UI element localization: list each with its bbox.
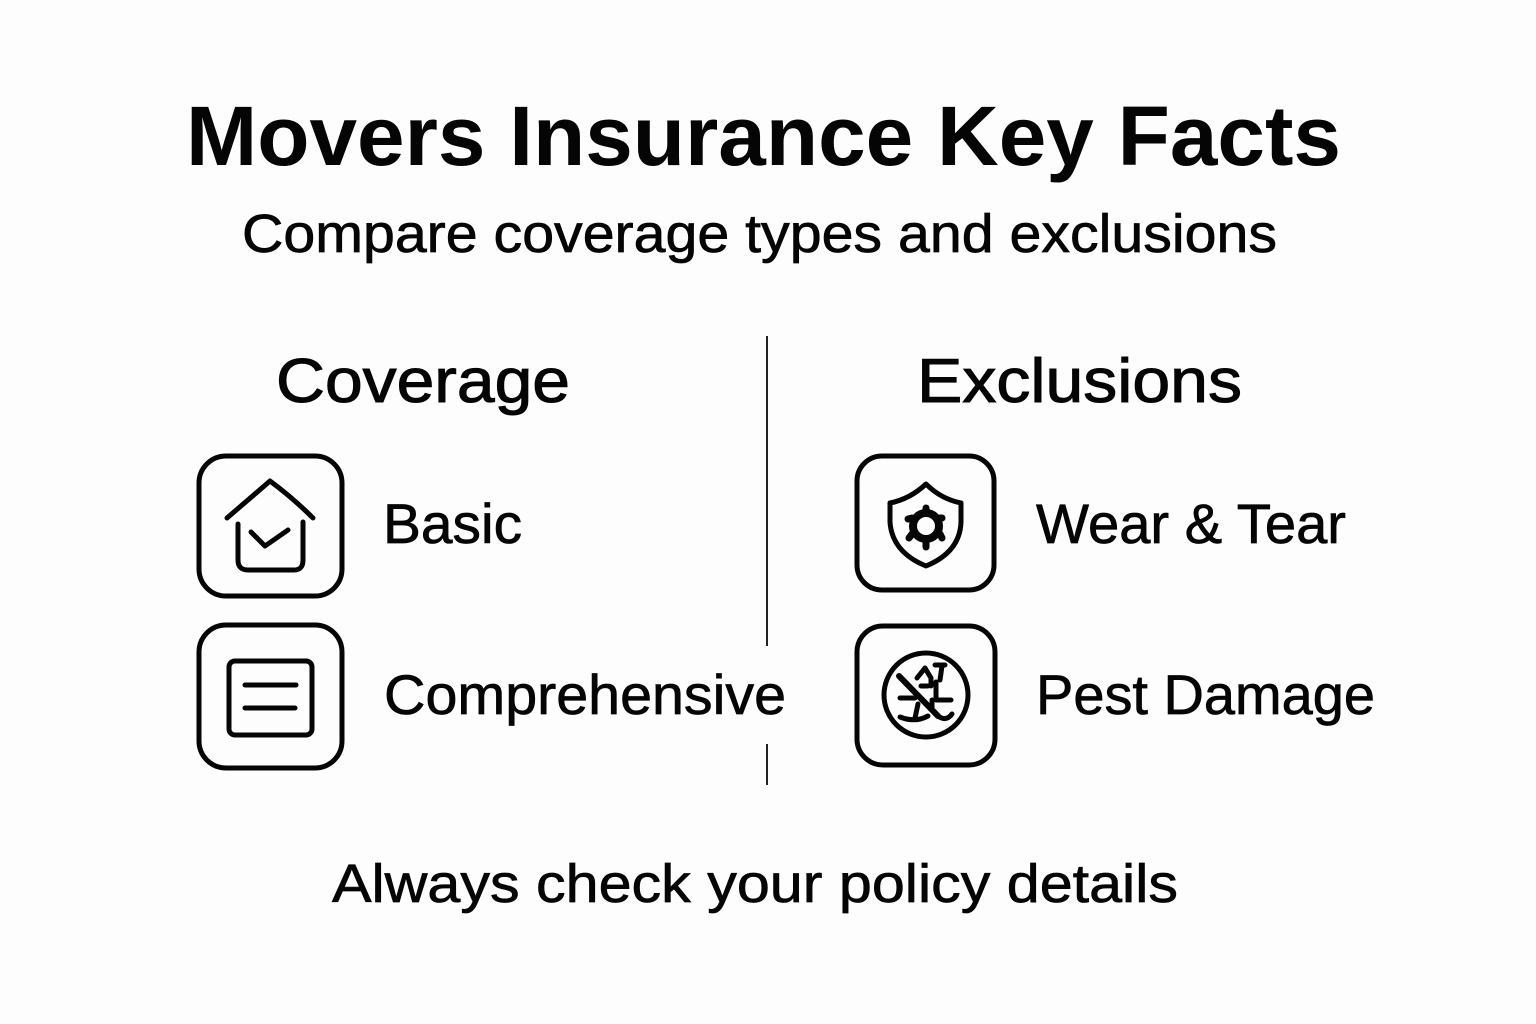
subtitle: Compare coverage types and exclusions xyxy=(242,204,1277,264)
icon: house with check xyxy=(199,456,342,596)
divider xyxy=(766,336,768,785)
label: wear and tear: Wear & Tear xyxy=(1036,492,1346,555)
icon: shield with gear xyxy=(857,456,994,590)
heading: coverage: Coverage xyxy=(276,347,570,416)
title: Movers Insurance Key Facts xyxy=(186,89,1341,183)
label: basic: Basic xyxy=(383,492,522,555)
label: comprehensive: Comprehensive xyxy=(384,663,786,726)
icon: document lines xyxy=(199,625,342,768)
footer note: Always check your policy details xyxy=(332,854,1178,914)
icon: no pests xyxy=(857,626,995,765)
heading: exclusions: Exclusions xyxy=(917,347,1242,416)
label: pest damage: Pest Damage xyxy=(1036,663,1375,726)
